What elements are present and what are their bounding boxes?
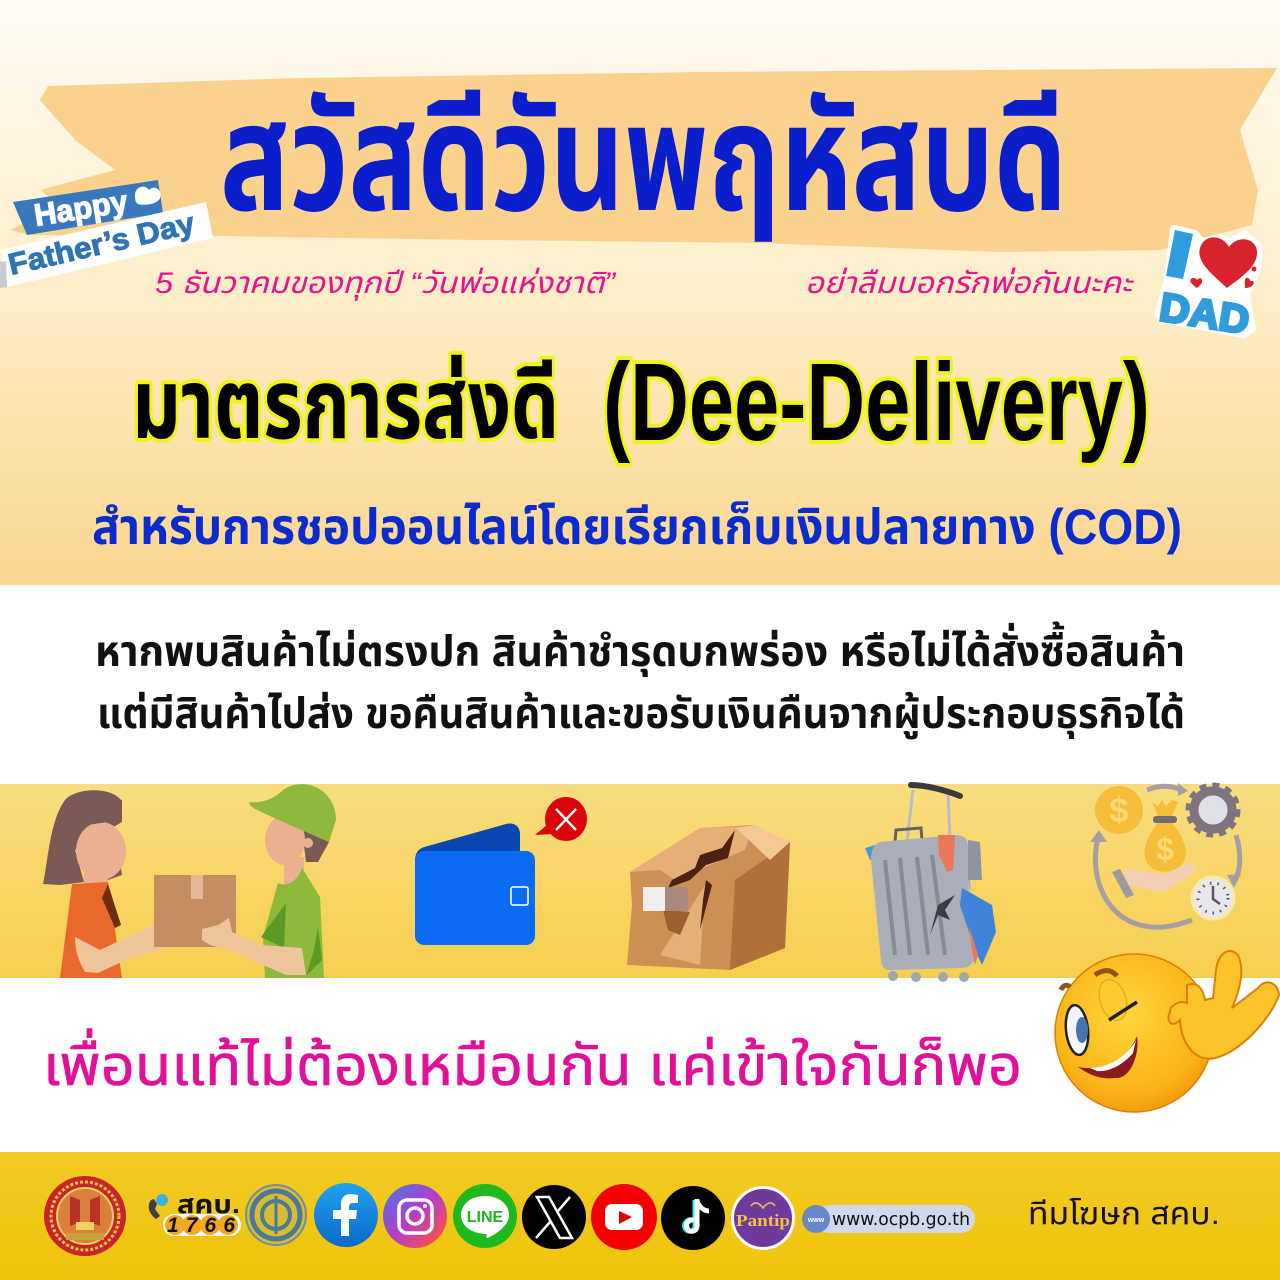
icon: blue wallet with error bubble [415,797,587,945]
icon: YouTube [591,1184,657,1250]
website pill: www.ocpb.go.th [832,1209,970,1230]
badge: Happy Father's Day: Father’s Day [5,207,198,282]
icon: Facebook [314,1183,378,1247]
subheading: COD: สำหรับการชอปออนไลน์โดยเรียกเก็บเงินปลายทาง (COD) [92,499,1182,555]
icon: refund money cycle [1090,783,1241,927]
icon: refund money cycle: $ [1110,792,1129,830]
icon: LINE [453,1184,517,1248]
icon: X [522,1185,586,1249]
panel: white body text: หากพบสินค้าไม่ตรงปก สินค้าชำรุดบกพร่อง หรือไม่ได้สั่งซื้อสินค้า [95,621,1185,677]
footer credit: ทีมโฆษก สคบ. [1028,1196,1220,1231]
brush stroke behind title [10,68,1277,252]
background: top cream panel [0,0,1280,585]
icon: Instagram [383,1184,447,1248]
badge: Happy Father's Day: Happy [32,184,131,233]
logo: OCPB seal [44,1176,126,1256]
illustration: parcel box [154,875,236,947]
heading: Dee-Delivery [132,341,1150,464]
badge: Happy Father's Day [0,180,213,288]
icon: LINE: LINE [467,1209,504,1226]
illustration: delivery man [202,784,336,978]
panel: white body text [0,585,1280,784]
illustration: damaged box [627,825,790,970]
sticker: I love DAD [1157,229,1258,343]
heading: Dee-Delivery: มาตรการส่งดี [132,349,559,459]
panel: friendship slogan: เพื่อนแท้ไม่ต้องเหมือนกัน แค่เข้าใจกันก็พอ [43,1028,1022,1097]
icon: Pantip: Pantip [736,1211,790,1230]
illustration: woman receiving parcel [43,790,180,978]
sticker: I love DAD: DAD [1157,285,1252,343]
emoji: winking ok hand [1055,951,1279,1112]
logo: hotline 1766: 1766 [167,1214,235,1237]
logo: hotline 1766: สคบ. [177,1189,240,1219]
icon: TikTok [661,1186,725,1250]
logo: OCPB ring [246,1185,306,1245]
website pill [802,1205,975,1233]
icon: refund money cycle: $ [1156,831,1174,867]
panel: friendship slogan [0,978,1280,1152]
icon: Pantip [732,1188,794,1248]
logo: hotline 1766 [149,1189,241,1237]
panel: white body text: แต่มีสินค้าไปส่ง ขอคืนสินค้าและขอรับเงินคืนจากผู้ประกอบธุรกิจได้ [97,690,1185,739]
footer bar [0,1152,1280,1280]
website pill: www [807,1217,825,1224]
illustration: broken suitcase [865,785,996,982]
band: illustrations background [0,784,1280,978]
note: tell dad you love him: อย่าลืมบอกรักพ่อกันนะคะ [805,267,1135,300]
note: national father's day: 5 ธันวาคมของทุกปี “วันพ่อแห่งชาติ” [155,267,617,301]
